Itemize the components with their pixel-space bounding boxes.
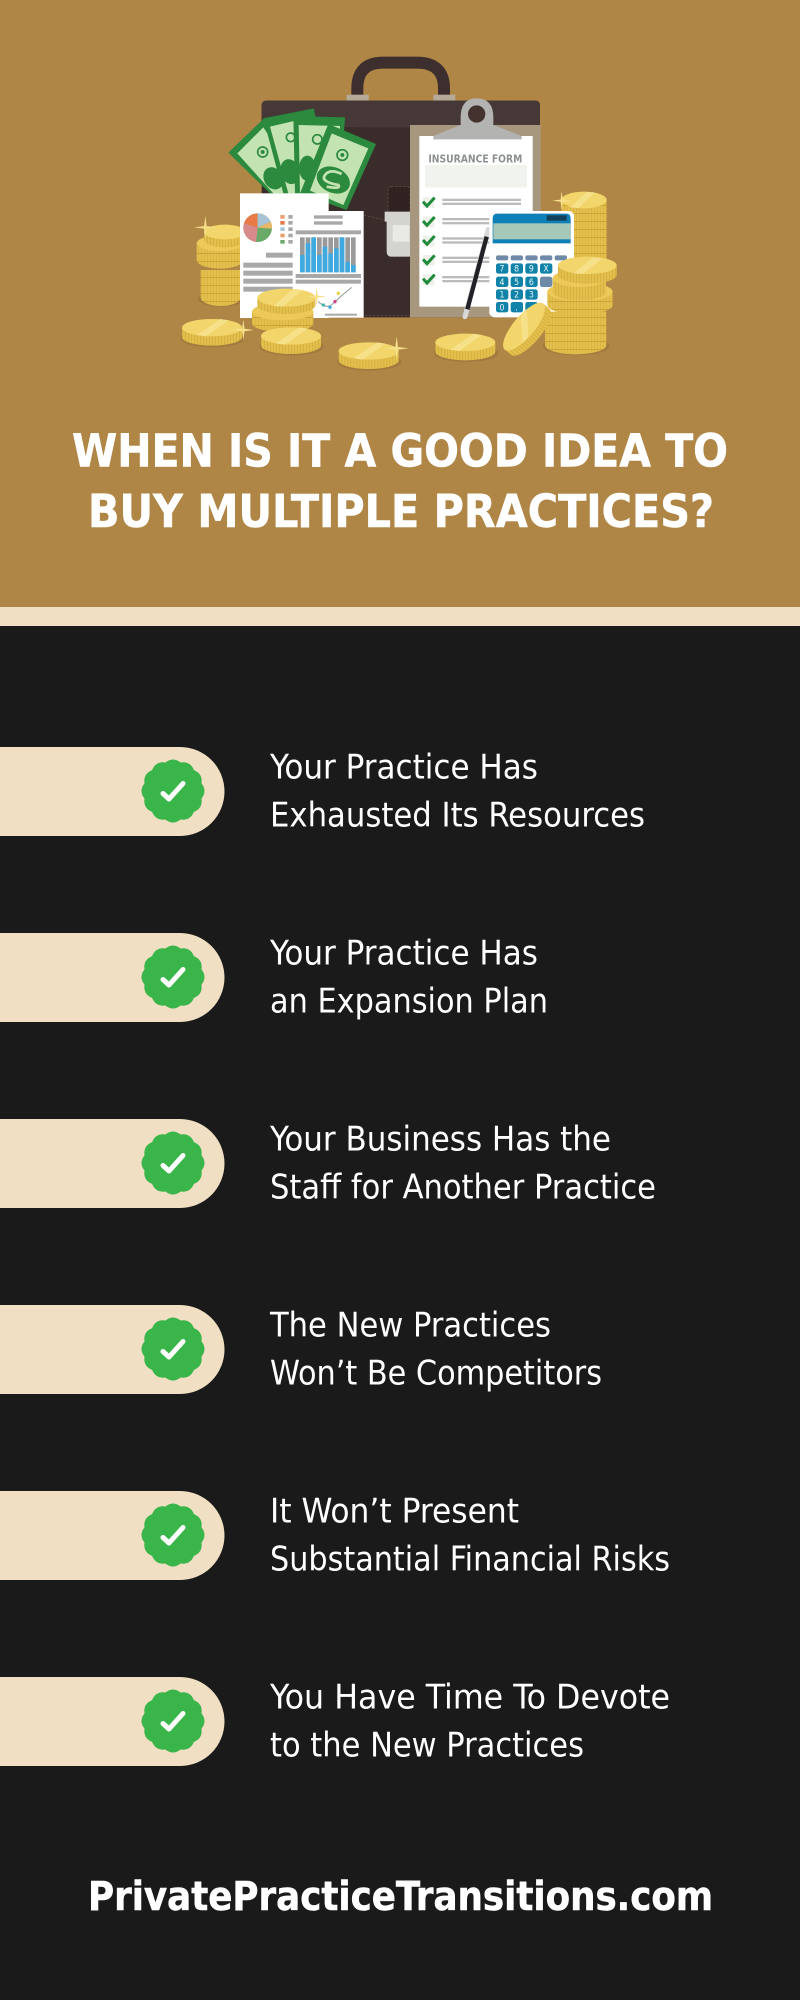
middle coin stack xyxy=(252,287,326,332)
icon: calculator: 9 xyxy=(529,265,534,275)
item 3: Staff for Another Practice xyxy=(270,1168,656,1208)
icon: calculator xyxy=(489,211,574,317)
loose coins xyxy=(180,297,558,371)
item 1: Your Practice Has xyxy=(269,748,538,788)
item 4: Won’t Be Competitors xyxy=(270,1354,602,1394)
cream divider band xyxy=(0,607,800,626)
icon: calculator: 1 xyxy=(500,291,505,301)
item 4 xyxy=(0,1305,602,1394)
document: pie chart report xyxy=(240,193,329,318)
item 6: You Have Time To Devote xyxy=(269,1678,670,1718)
title xyxy=(72,424,728,538)
item 4: The New Practices xyxy=(269,1306,551,1346)
item 5: Substantial Financial Risks xyxy=(270,1540,670,1580)
document: bar chart report xyxy=(293,211,364,318)
icon: calculator: 8 xyxy=(514,265,519,275)
icon: clipboard with insurance form: INSURANCE FORM xyxy=(428,153,522,166)
illustration: briefcase, money, documents, calculator and coins xyxy=(180,63,617,371)
icon: clipboard with insurance form xyxy=(410,98,541,317)
right front coin stack xyxy=(543,257,617,355)
icon: calculator: 2 xyxy=(514,291,519,301)
icon: pen xyxy=(465,229,488,317)
item 6 xyxy=(0,1677,670,1766)
back coin stack xyxy=(552,191,607,260)
left coin stack xyxy=(194,216,246,307)
item 2: Your Practice Has xyxy=(269,934,538,974)
item 2 xyxy=(0,933,548,1022)
icon: calculator: 7 xyxy=(500,265,505,275)
icon: calculator: 5 xyxy=(514,278,519,288)
icon: briefcase xyxy=(262,63,540,317)
item 1: Exhausted Its Resources xyxy=(270,796,645,836)
icon: calculator: 6 xyxy=(529,278,534,288)
title: BUY MULTIPLE PRACTICES? xyxy=(88,485,714,538)
item 5: It Won’t Present xyxy=(270,1492,519,1532)
icon: calculator: 4 xyxy=(500,278,505,288)
icon: calculator: 3 xyxy=(529,291,534,301)
item 6: to the New Practices xyxy=(270,1726,584,1766)
item 5 xyxy=(0,1491,670,1580)
title: WHEN IS IT A GOOD IDEA TO xyxy=(72,424,728,478)
icon: calculator: . xyxy=(515,303,518,313)
item 2: an Expansion Plan xyxy=(270,982,548,1022)
icon: banknotes xyxy=(228,108,376,210)
item 3 xyxy=(0,1119,656,1208)
dark body panel xyxy=(0,626,800,2000)
icon: calculator: 0 xyxy=(500,303,505,313)
item 1 xyxy=(0,747,645,836)
icon: calculator: X xyxy=(543,265,549,275)
footer website: PrivatePracticeTransitions.com xyxy=(88,1874,713,1920)
item 3: Your Business Has the xyxy=(269,1120,611,1160)
header panel xyxy=(0,0,800,607)
